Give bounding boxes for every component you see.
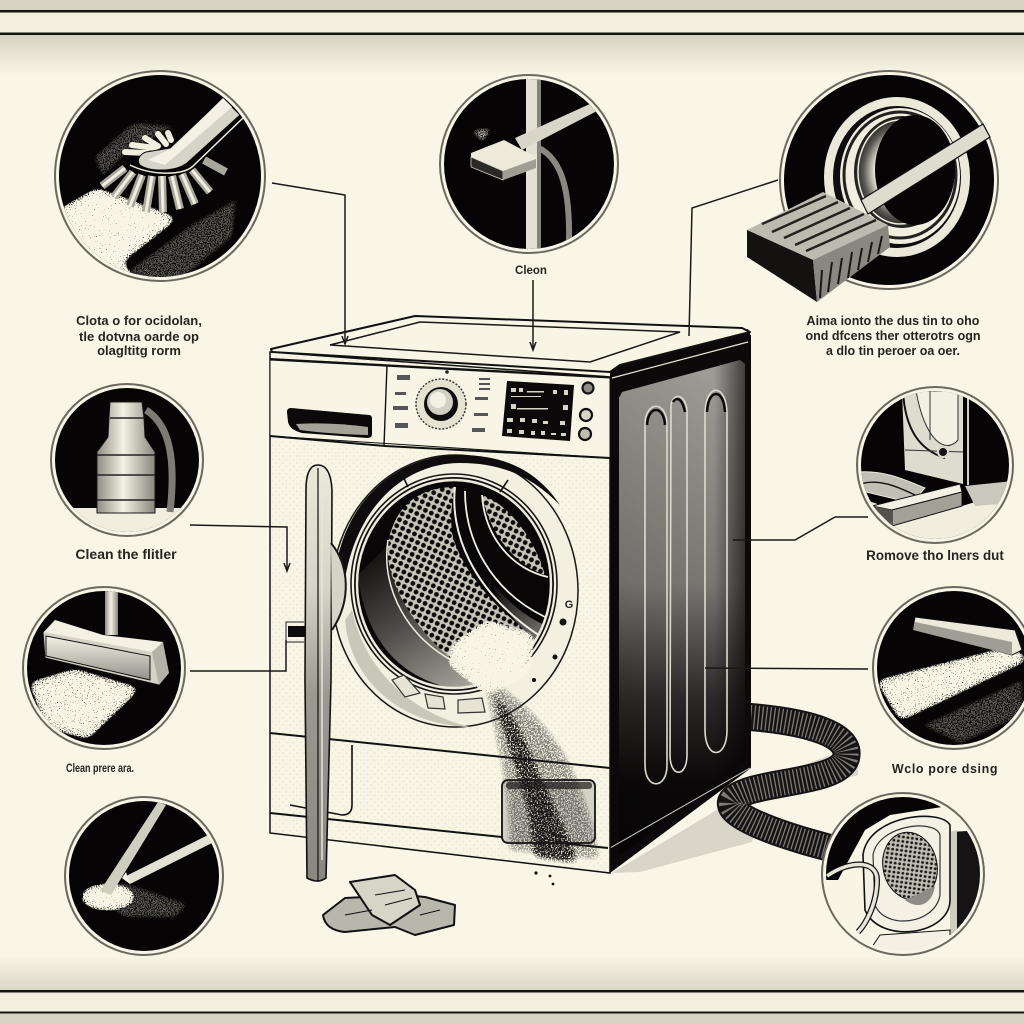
- bottom frame band: [0, 955, 1024, 1024]
- dust pouring light cloud: [448, 620, 535, 695]
- mesh right section: [482, 495, 545, 575]
- lower right drum wall: [494, 586, 542, 640]
- vent hose: [731, 717, 847, 848]
- machine front: [270, 352, 610, 873]
- circle: vacuum nozzle: [23, 587, 185, 749]
- lower left drum wall: [358, 547, 482, 687]
- lint specks under machine: [534, 871, 554, 885]
- circle: nozzle with dust stream: [873, 587, 1024, 752]
- circle: scrub pad on pole: [440, 75, 618, 255]
- upper bristles: [125, 133, 171, 153]
- door: [286, 465, 346, 882]
- top lid: [271, 316, 750, 372]
- circle: interior service view: [857, 387, 1015, 545]
- door opening rim: [357, 480, 551, 688]
- caption: top right paragraph: ond dfcens ther otterotrs ogn: [806, 329, 980, 343]
- floor shadow: [612, 745, 858, 873]
- caption: top left paragraph: olagltitg rorm: [97, 343, 181, 358]
- dust falling dark plume: [470, 660, 612, 872]
- mesh drum wall: [388, 487, 540, 680]
- program labels: [393, 375, 490, 432]
- dust wedge: [64, 188, 173, 273]
- connector lines: [190, 180, 868, 671]
- top frame band: [0, 0, 1024, 75]
- ring details: [392, 470, 573, 713]
- control buttons: [579, 382, 594, 440]
- circle: brush sweeping dust: [54, 70, 266, 282]
- bristle block: [747, 192, 890, 302]
- caption: top right paragraph: Aima ionto the dus tin to oho: [807, 314, 980, 328]
- lower bristles: [102, 160, 226, 212]
- digital display: [502, 381, 574, 441]
- caption: top left paragraph: Clota o for ocidolan,: [76, 313, 202, 328]
- door ring: [332, 455, 578, 727]
- caption: remove inner dust: Romove tho lners dut: [866, 548, 1004, 563]
- washer dryer machine: [270, 316, 751, 882]
- ring details: G: [565, 599, 573, 611]
- bottle body: [97, 402, 155, 513]
- caption: top centre: Cleon: [515, 265, 547, 277]
- long brush handle: [861, 124, 990, 214]
- drawer handle: [287, 408, 372, 438]
- circle: brush at drum opening: [747, 71, 998, 302]
- caption: clean the filter: Clean the flitler: [75, 546, 177, 562]
- circle: cleaner bottle: [50, 384, 210, 548]
- circle: lint screen detail: [822, 793, 985, 965]
- caption: top right paragraph: [806, 314, 980, 358]
- machine side panel: [610, 329, 751, 873]
- selector knob: [416, 370, 466, 429]
- dust filter flap: [502, 780, 595, 843]
- handle: [138, 107, 240, 170]
- side panel grooves: [645, 390, 727, 784]
- caption: top right paragraph: a dlo tin peroer oa oer.: [826, 344, 960, 358]
- caption: top left paragraph: tle dotvna oarde op: [79, 329, 199, 344]
- lower panel lines and kick plate: [270, 733, 610, 848]
- drum interior: [358, 481, 550, 687]
- caption: clean area: Clean prere ara.: [66, 763, 134, 775]
- caption: top left paragraph: [76, 313, 202, 358]
- control panel: [270, 359, 610, 458]
- circle: wand on carpet: [65, 797, 223, 955]
- hose on bottle: [146, 410, 172, 512]
- crumpled cloth pile: [323, 875, 455, 935]
- drum opening rings: [824, 97, 970, 257]
- caption: bottom right: Wclo pore dsing: [892, 762, 998, 776]
